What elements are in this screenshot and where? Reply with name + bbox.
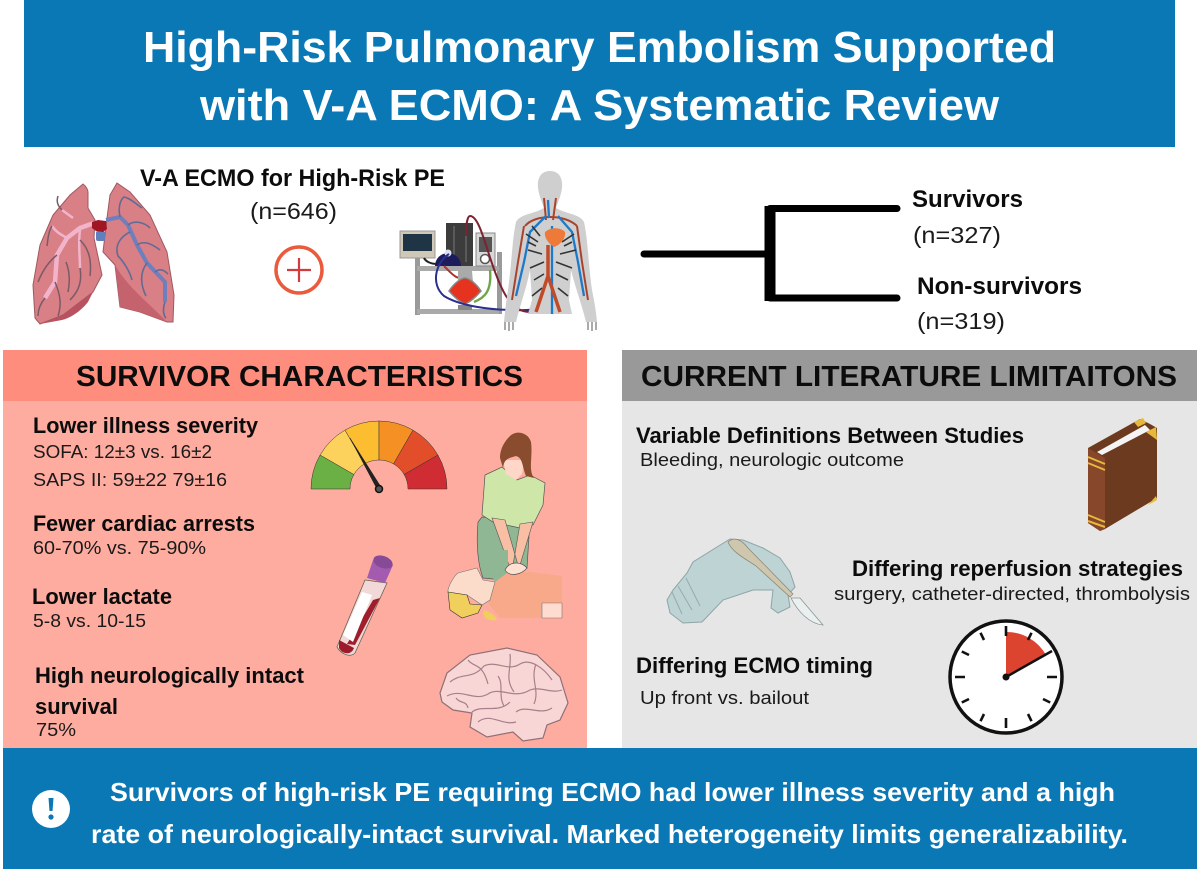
icon: lungs xyxy=(33,183,174,324)
text: lower lactate: 5-8 vs. 10-15 xyxy=(33,611,146,631)
text: differing ECMO timing: Up front vs. bailout xyxy=(640,688,809,708)
label: non-survivors: (n=319) xyxy=(917,308,1005,334)
text: lower lactate: Lower lactate xyxy=(32,584,172,609)
heading: V-A ECMO for High-Risk PE: V-A ECMO for High-Risk PE xyxy=(140,165,445,192)
icon: severity gauge xyxy=(311,421,447,492)
icon: clock xyxy=(950,621,1062,733)
text: differing ECMO timing xyxy=(636,653,873,708)
title banner: with V-A ECMO: A Systematic Review xyxy=(199,81,1000,130)
text: variable definitions xyxy=(636,423,1024,470)
text: lower lactate xyxy=(32,584,172,631)
text: variable definitions: Variable Definitions Between Studies xyxy=(636,423,1024,448)
icon: human circulatory system xyxy=(504,171,597,331)
icon: blood tube xyxy=(337,553,394,655)
conclusion text xyxy=(91,777,1128,849)
heading: V-A ECMO for High-Risk PE xyxy=(140,165,445,224)
text: variable definitions: Bleeding, neurologic outcome xyxy=(640,450,904,470)
text: lower illness severity: Lower illness severity xyxy=(33,413,259,438)
icon: ECMO machine xyxy=(400,216,564,315)
label: non-survivors xyxy=(917,273,1082,334)
icon: exclamation xyxy=(32,790,70,828)
label: survivors: (n=327) xyxy=(913,222,1001,248)
heading: V-A ECMO for High-Risk PE: (n=646) xyxy=(250,198,337,224)
text: differing reperfusion strategies: Differing reperfusion strategies xyxy=(852,556,1183,581)
text: fewer cardiac arrests: Fewer cardiac arrests xyxy=(33,511,255,536)
title banner xyxy=(24,0,1175,147)
text: fewer cardiac arrests: 60-70% vs. 75-90% xyxy=(33,538,206,558)
label: survivors: Survivors xyxy=(912,186,1023,213)
text: lower illness severity: SAPS II: 59±22 79±16 xyxy=(33,470,227,490)
icon: book xyxy=(1088,418,1157,531)
text: neurologically intact survival xyxy=(35,663,305,740)
outcome branching diagram xyxy=(644,206,897,301)
text: differing reperfusion strategies xyxy=(834,556,1190,604)
icon: plus xyxy=(276,247,322,293)
text: neurologically intact survival: 75% xyxy=(36,720,76,740)
text: neurologically intact survival: High neurologically intact xyxy=(35,663,305,688)
label: survivors xyxy=(912,186,1023,248)
conclusion text: Survivors of high-risk PE requiring ECMO had lower illness severity and a high xyxy=(110,777,1115,807)
panel: current literature limitations xyxy=(622,350,1197,748)
text: lower illness severity: SOFA: 12±3 vs. 16±2 xyxy=(33,442,212,462)
label: non-survivors: Non-survivors xyxy=(917,273,1082,300)
panel heading: SURVIVOR CHARACTERISTICS xyxy=(76,361,523,393)
panel heading: CURRENT LITERATURE LIMITAITONS xyxy=(641,361,1177,393)
text: fewer cardiac arrests xyxy=(33,511,255,558)
icon: gloved hand with scalpel xyxy=(667,539,823,625)
icon: CPR illustration xyxy=(448,433,562,620)
text: differing reperfusion strategies: surgery, catheter-directed, thrombolysis xyxy=(834,584,1190,604)
text: neurologically intact survival: survival xyxy=(35,694,118,719)
icon: brain xyxy=(440,648,568,741)
title banner: High-Risk Pulmonary Embolism Supported xyxy=(143,23,1056,72)
text: lower illness severity xyxy=(33,413,259,490)
conclusion text: rate of neurologically-intact survival. Marked heterogeneity limits generalizability. xyxy=(91,819,1128,849)
panel: survivor characteristics xyxy=(3,350,587,748)
text: differing ECMO timing: Differing ECMO timing xyxy=(636,653,873,678)
conclusion banner xyxy=(3,748,1197,869)
